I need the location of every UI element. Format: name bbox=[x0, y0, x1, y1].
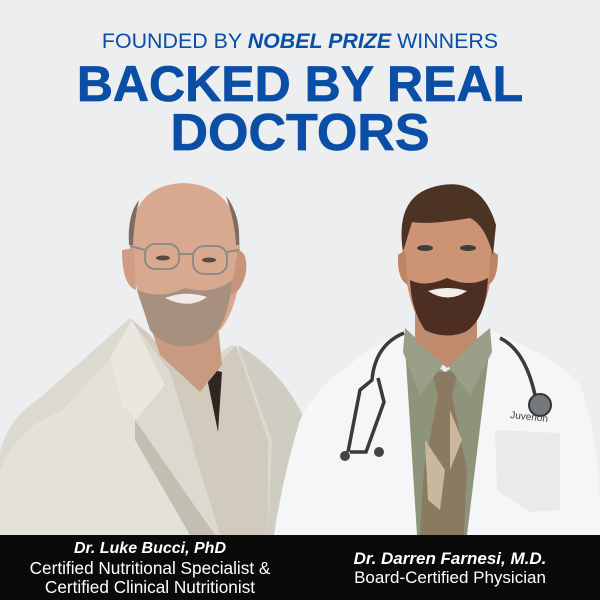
caption: Dr. Darren Farnesi: Board-Certified Physician bbox=[354, 568, 546, 587]
caption: Dr. Luke Bucci: Certified Nutritional Specialist & bbox=[30, 558, 270, 578]
portrait: Dr. Luke Bucci bbox=[0, 183, 307, 535]
portrait: Dr. Darren Farnesi bbox=[274, 184, 600, 535]
caption bar bbox=[0, 535, 600, 600]
subtitle: FOUNDED BY NOBEL PRIZE WINNERS bbox=[102, 29, 498, 53]
caption: Dr. Luke Bucci: Dr. Luke Bucci, PhD bbox=[74, 540, 226, 557]
portrait: Dr. Darren Farnesi: Juvenon bbox=[510, 410, 548, 425]
caption: Dr. Darren Farnesi: Dr. Darren Farnesi, M.D. bbox=[354, 549, 546, 568]
caption: Dr. Darren Farnesi bbox=[354, 549, 546, 587]
caption: Dr. Luke Bucci: Certified Clinical Nutritionist bbox=[45, 577, 255, 597]
title: BACKED BY REAL bbox=[77, 56, 523, 112]
title bbox=[77, 56, 523, 162]
title: DOCTORS bbox=[170, 104, 430, 162]
caption: Dr. Luke Bucci bbox=[30, 540, 270, 597]
